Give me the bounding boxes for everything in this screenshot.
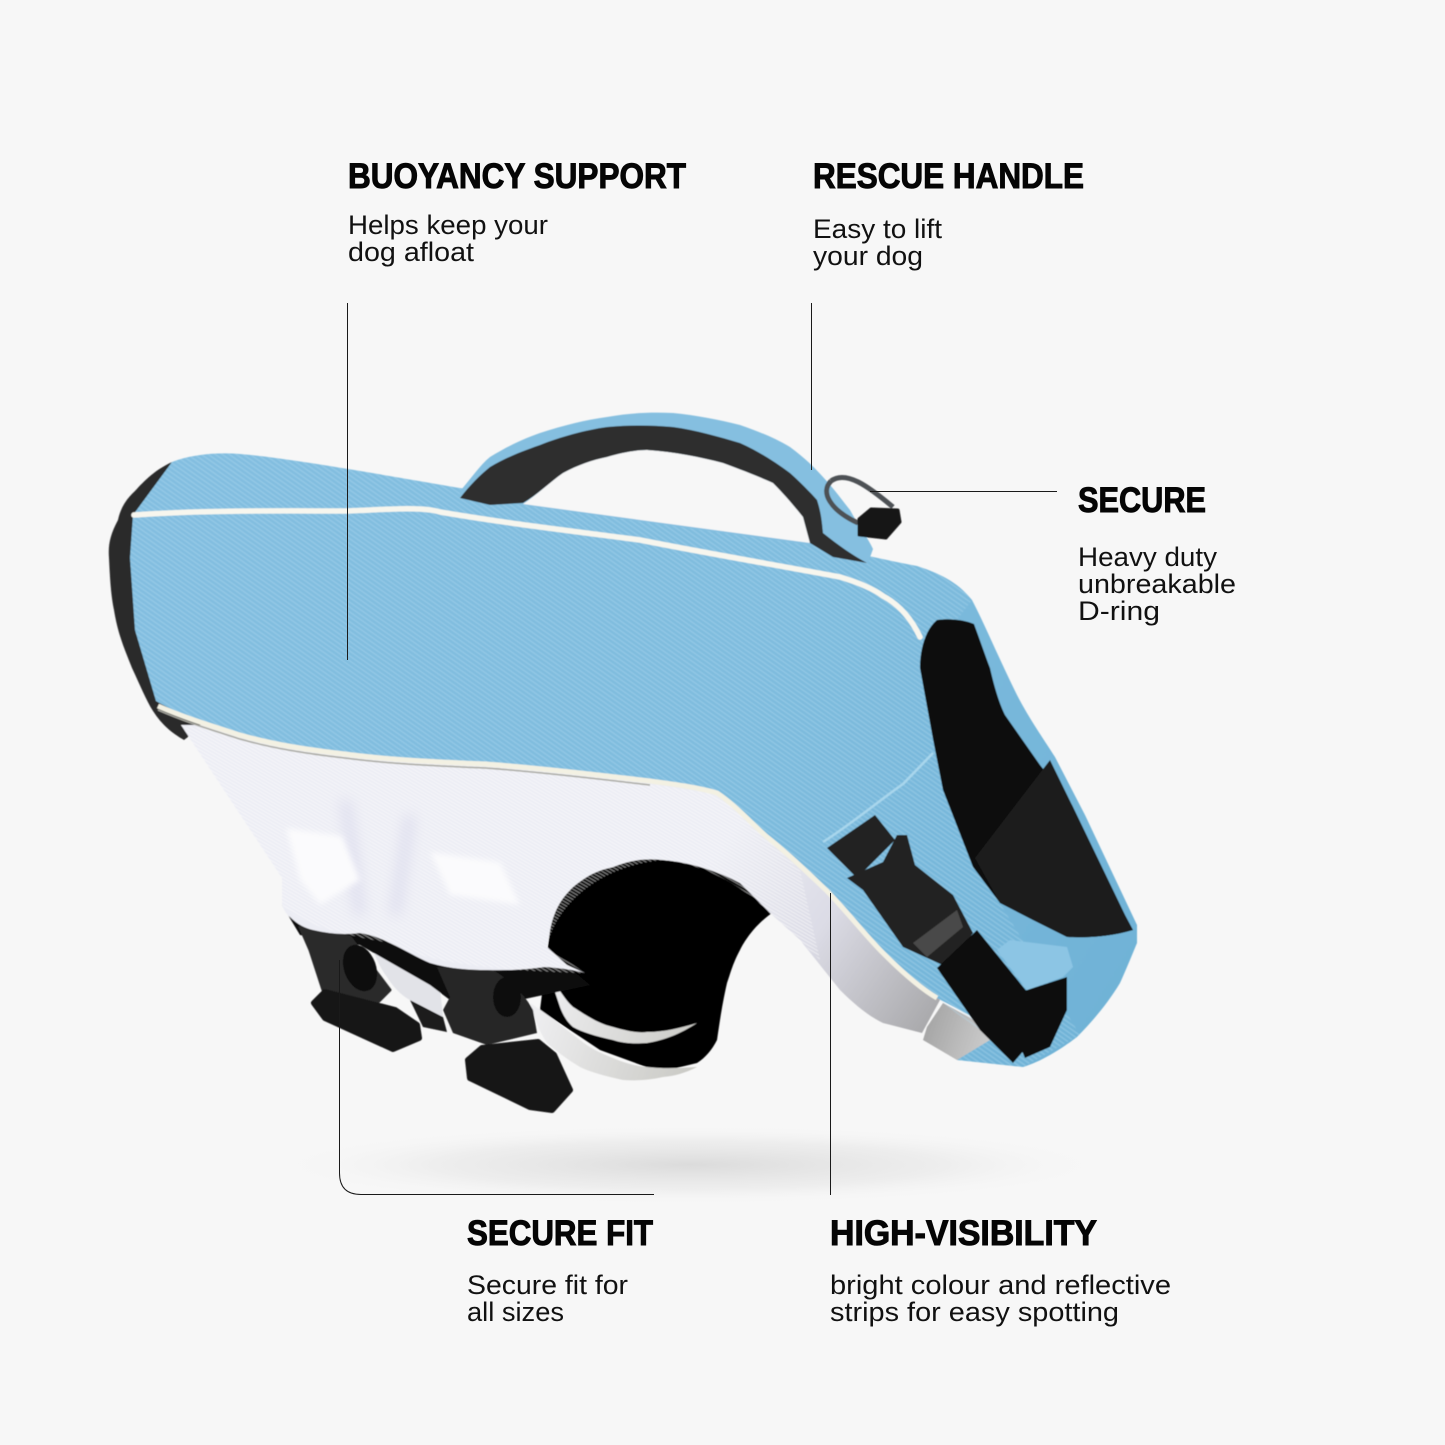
black pocket behind front flap <box>1000 977 1067 1058</box>
callout: secure fit: all sizes <box>467 1297 564 1327</box>
bottom piping shadow <box>158 710 650 785</box>
bottom reflective piping <box>158 706 937 998</box>
callout: secure fit: SECURE FIT <box>467 1214 653 1253</box>
lining lower grey panel <box>975 760 1133 937</box>
belly fabric weave <box>181 725 820 973</box>
leader line: high-visibility <box>830 893 832 1195</box>
callout: secure fit: Secure fit for <box>467 1270 628 1300</box>
underside black lining <box>540 859 772 1072</box>
buckle webbing patch <box>913 910 963 957</box>
rescue handle black grip <box>460 426 867 563</box>
D-ring webbing tag <box>859 509 900 538</box>
seam on blue body <box>823 753 933 842</box>
side release buckle <box>847 835 973 967</box>
callout: secure: D-ring <box>1078 596 1160 626</box>
lower strap <box>937 930 1050 1063</box>
life jacket illustration <box>109 413 1137 1110</box>
belly fold shading <box>345 800 410 915</box>
callout: high-visibility: strips for easy spotting <box>830 1297 1119 1327</box>
D-ring <box>827 477 900 538</box>
callout: high-visibility <box>830 1214 1171 1327</box>
floor shadow <box>270 1125 1110 1205</box>
left buckle <box>300 927 419 1049</box>
callout: buoyancy support: Helps keep your <box>348 210 548 240</box>
side buckle upper strap <box>827 815 895 878</box>
callout: secure fit <box>467 1214 653 1327</box>
callout: secure: Heavy duty <box>1078 542 1218 572</box>
callout: secure: SECURE <box>1078 481 1206 520</box>
left buckle strap <box>314 992 419 1049</box>
callout: buoyancy support: BUOYANCY SUPPORT <box>348 157 686 196</box>
black under-edge of belly <box>282 905 590 1000</box>
callout: secure: unbreakable <box>1078 569 1236 599</box>
callout: buoyancy support <box>348 157 686 267</box>
right buckle strap <box>468 1042 570 1110</box>
leader line: secure fit <box>340 960 654 1194</box>
front blue flap <box>997 940 1073 990</box>
leader line: buoyancy <box>346 303 348 660</box>
callout: high-visibility: bright colour and reflective <box>830 1270 1171 1300</box>
right buckle <box>437 967 570 1110</box>
white harness strap, upper band <box>550 977 697 1043</box>
white belly panel <box>181 725 940 1033</box>
callout: rescue handle: Easy to lift <box>813 214 943 244</box>
leader line: rescue handle <box>810 303 812 470</box>
black interior lining <box>920 619 1133 937</box>
rescue handle opening <box>523 450 810 543</box>
top reflective piping <box>134 509 920 637</box>
callout: high-visibility: HIGH-VISIBILITY <box>830 1214 1097 1253</box>
callout: buoyancy support: dog afloat <box>348 237 475 267</box>
belly fold highlights <box>286 828 520 905</box>
grey front tab <box>923 1003 1013 1062</box>
black binding at rear edge <box>109 462 210 740</box>
blue fabric weave <box>130 453 1080 1067</box>
white strap between buckles <box>373 950 443 1017</box>
callout: rescue handle: RESCUE HANDLE <box>813 157 1084 196</box>
callout: secure <box>1078 481 1236 626</box>
bridge between buckles <box>410 1000 447 1032</box>
blue main body <box>130 453 1137 1067</box>
white harness strap, lower band <box>530 1003 697 1080</box>
callout: rescue handle: your dog <box>813 241 923 271</box>
callout: rescue handle <box>813 157 1084 271</box>
leader line: secure <box>870 490 1057 492</box>
rescue handle blue band <box>460 413 873 563</box>
